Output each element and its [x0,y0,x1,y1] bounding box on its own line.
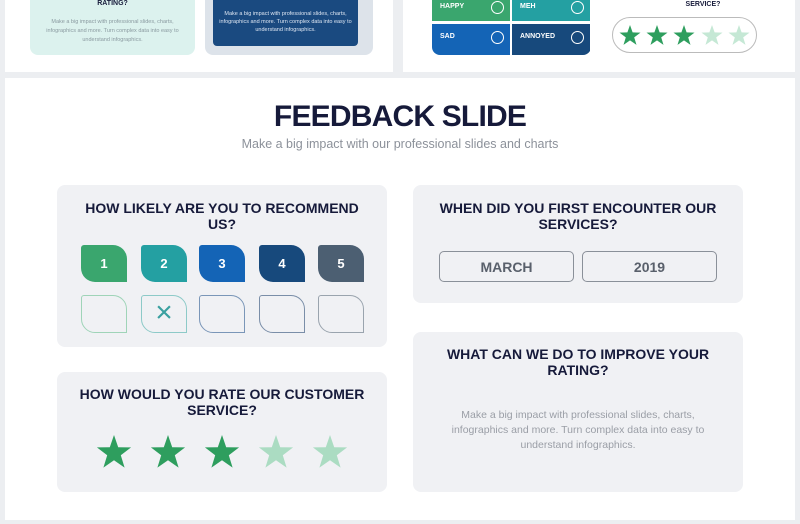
panel: recommend: 4 [278,256,286,271]
panel: improve: RATING? [547,362,609,378]
panel: improve: Make a big impact with professional slides, charts, infographics and more. Turn complex data into easy to understand infographics. [452,409,704,451]
panel: recommend: US? [208,216,236,232]
panel: encounter: WHEN DID YOU FIRST ENCOUNTER OUR [440,200,716,216]
panel: recommend: 3 [218,256,226,271]
title: FEEDBACK SLIDE [274,100,526,133]
panel: recommend: HOW LIKELY ARE YOU TO RECOMMEND [85,200,359,216]
panel: encounter: MARCH [480,258,533,274]
panel: encounter: SERVICES? [538,216,618,232]
top panel left [5,0,393,72]
panel: customer service: HOW WOULD YOU RATE OUR CUSTOMER [80,386,364,402]
mint card [30,0,195,55]
panel: improve [413,332,743,492]
mood grid: HAPPY [440,3,464,10]
panel: customer service [57,372,387,492]
panel: recommend: 2 [160,256,168,271]
panel: recommend [57,185,387,347]
subtitle: Make a big impact with our professional slides and charts [242,137,558,151]
panel: recommend: 5 [337,256,345,271]
mood grid [432,0,590,55]
panel: encounter: 2019 [634,258,665,274]
panel: customer service: SERVICE? [187,402,257,418]
mood grid: MEH [520,3,536,10]
mood grid: SAD [440,33,455,40]
mood grid: ANNOYED [520,33,555,40]
panel: recommend: × [155,296,173,329]
dark card: Make a big impact with professional slides, charts, infographics and more. Turn complex data into easy to understand infographics. [219,11,352,33]
panel: recommend: 1 [100,256,108,271]
top panel right: SERVICE? [686,1,720,8]
mint card: Make a big impact with professional slides, charts, infographics and more. Turn complex data into easy to understand infographics. [46,19,179,43]
small star rating pill [612,17,757,53]
panel: encounter [413,185,743,303]
dark card [205,0,373,55]
mint card: RATING? [97,0,128,7]
stars [97,435,347,468]
top panel right [403,0,795,72]
panel: improve: WHAT CAN WE DO TO IMPROVE YOUR [447,346,709,362]
